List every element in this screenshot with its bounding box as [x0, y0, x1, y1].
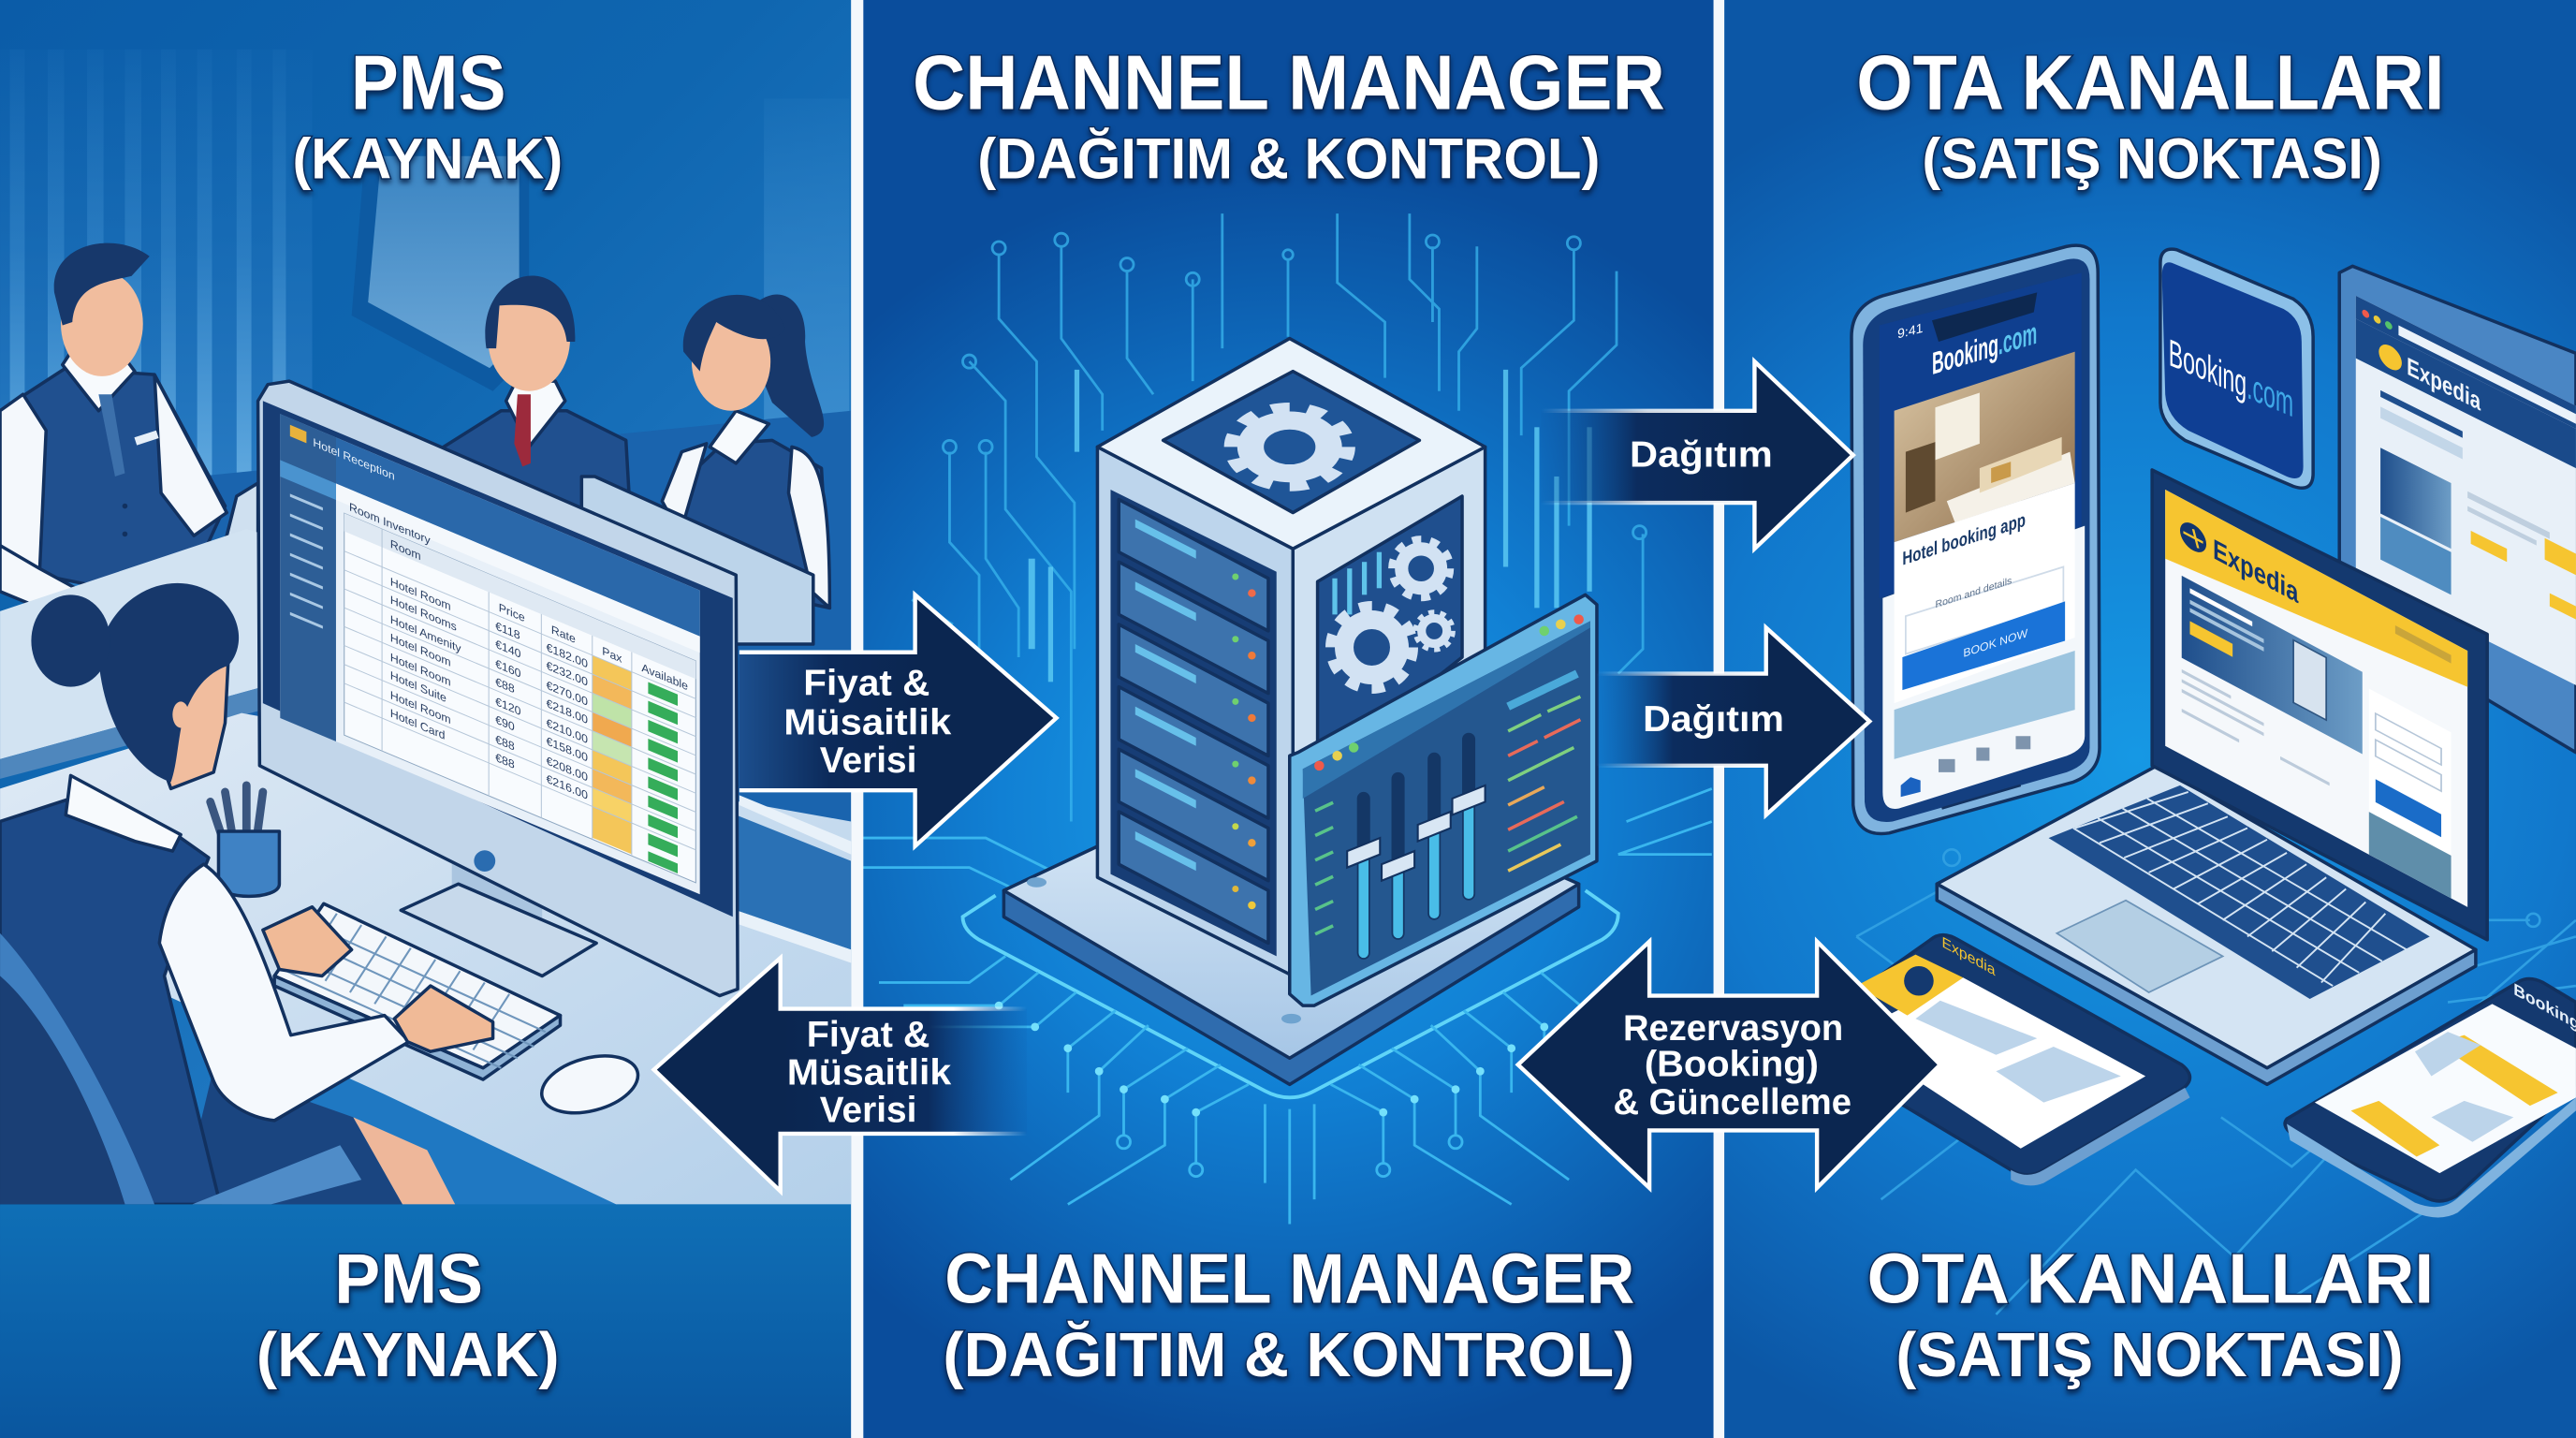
chair back seat	[131, 1117, 402, 1204]
lap	[181, 1068, 402, 1204]
PMS screen table	[280, 414, 700, 894]
top gear	[1234, 409, 1345, 485]
seated receptionist	[0, 583, 493, 1204]
keyboard	[274, 903, 561, 1079]
PMS screen table: €216.00	[547, 771, 588, 802]
PMS screen table: Room Inventory	[349, 500, 431, 548]
Booking.com tile	[2160, 249, 2313, 488]
channel manager background	[862, 0, 1714, 1438]
PMS screen table: Room	[390, 536, 421, 563]
curtains	[0, 50, 313, 592]
Booking.com tile: Booking.com	[2169, 330, 2293, 425]
arrow: booking and update double	[1518, 942, 1940, 1188]
OTA traces	[1856, 849, 2576, 1314]
person: center manager	[444, 275, 631, 526]
circuit traces top	[912, 213, 1647, 822]
monitor body	[258, 381, 738, 996]
PMS screen table: €182.00	[547, 640, 588, 671]
panel: OTA Kanallari	[1725, 0, 2576, 1438]
leg	[353, 1117, 455, 1204]
monitor screen	[2356, 296, 2576, 685]
back counter	[198, 411, 851, 920]
laptop lid	[2152, 470, 2487, 940]
tower top	[1097, 339, 1486, 549]
PMS screen table: Hotel Suite	[390, 668, 446, 705]
neck and face	[148, 657, 228, 788]
arrow: distribution one	[1541, 361, 1853, 549]
PMS screen table: €88	[495, 750, 515, 771]
arrow: price and availability to channel manager: Verisi	[820, 741, 916, 781]
base glow outline	[963, 890, 1618, 1097]
person: right receptionist	[662, 294, 829, 608]
available column	[648, 682, 678, 873]
chair	[0, 933, 154, 1204]
booking card	[1895, 483, 2075, 703]
laptop base	[1937, 766, 2476, 1068]
power dot	[474, 850, 495, 872]
booking card: BOOK NOW	[1963, 626, 2027, 660]
arrow: distribution two	[1597, 627, 1869, 814]
OTA background	[1725, 0, 2576, 1438]
phone screen top	[1880, 272, 2082, 598]
laptop keyboard	[2049, 785, 2430, 999]
top recess	[1164, 372, 1419, 513]
title: OTA top: OTA KANALLARI	[1856, 40, 2445, 126]
title: Channel Manager bottom	[943, 1240, 1634, 1390]
pen cup	[211, 785, 279, 896]
Booking.com phone logo: Booking.com	[1932, 315, 2037, 382]
PMS screen table: €88	[495, 732, 515, 754]
title: PMS bottom: (KAYNAK)	[256, 1321, 560, 1390]
PMS screen table: €118	[495, 619, 520, 642]
PMS screen table: €160	[495, 656, 520, 681]
phone status: 9:41	[1897, 321, 1924, 342]
PMS screen table: Hotel Rooms	[390, 593, 457, 634]
base plate	[1003, 756, 1579, 1084]
circuit traces bottom	[862, 788, 1712, 1224]
PMS bottom band	[0, 1204, 851, 1438]
title: OTA top	[1856, 40, 2445, 191]
rear left monitor	[212, 483, 258, 611]
rear monitor	[581, 477, 813, 644]
PMS screen table: Pax	[602, 644, 622, 666]
ear	[172, 701, 189, 727]
arrow: booking and update double: & Güncelleme	[1613, 1082, 1852, 1123]
title: PMS top: (KAYNAK)	[292, 126, 563, 191]
arrow: booking and update double: Rezervasyon	[1623, 1008, 1843, 1049]
title: PMS top	[292, 40, 563, 191]
PMS screen table: €232.00	[547, 658, 588, 689]
tablet left	[1804, 933, 2190, 1185]
control panel with sliders	[1290, 594, 1597, 1005]
PMS screen table: €270.00	[547, 678, 588, 709]
slider knobs	[1347, 785, 1486, 881]
monitor stand	[452, 855, 542, 940]
data bars	[1029, 370, 1592, 682]
PMS screen table: Price	[499, 600, 525, 624]
tablet right	[2285, 978, 2576, 1217]
hotel room photo	[1895, 352, 2075, 542]
person: left receptionist	[0, 243, 227, 614]
arrow: distribution one: Dağıtım	[1630, 434, 1773, 475]
main desk	[0, 713, 851, 1204]
rack units	[1110, 490, 1277, 956]
title: OTA top: (SATIŞ NOKTASI)	[1922, 126, 2382, 191]
PMS screen table: €218.00	[547, 696, 588, 726]
title: OTA bottom	[1867, 1240, 2434, 1390]
PMS screen table: Available	[641, 660, 688, 693]
phone screen bottom	[1882, 526, 2085, 809]
collar	[66, 775, 181, 851]
PMS screen table: €120	[495, 694, 520, 718]
slider tracks	[1364, 740, 1469, 953]
tower window with gears	[1318, 496, 1462, 772]
wall light panel	[764, 98, 849, 509]
lower photo	[1895, 651, 2075, 759]
title: OTA bottom: (SATIŞ NOKTASI)	[1895, 1321, 2404, 1390]
arrow: price and availability back to PMS: Müsaitlik	[787, 1052, 952, 1093]
title: Channel Manager bottom: CHANNEL MANAGER	[944, 1240, 1634, 1318]
phone	[1852, 245, 2100, 833]
side booking box	[2369, 689, 2452, 856]
mouse	[535, 1047, 644, 1123]
tower left side	[1097, 447, 1293, 976]
PMS screen table: Hotel Room	[390, 630, 451, 669]
arrow: distribution two: Dağıtım	[1643, 699, 1784, 740]
title: PMS bottom: PMS	[334, 1240, 483, 1318]
sleeve	[159, 864, 409, 1121]
PMS screen table: €140	[495, 637, 520, 661]
PMS screen table: Hotel Room	[390, 650, 451, 689]
arrow: price and availability back to PMS: Verisi	[820, 1091, 916, 1131]
tower right side	[1293, 447, 1486, 976]
PMS background wall	[0, 0, 851, 1204]
hair	[98, 583, 239, 782]
phone nav	[1901, 736, 2030, 808]
window	[352, 156, 529, 391]
hero image	[2182, 576, 2363, 754]
monitor screen: Expedia	[2407, 352, 2481, 417]
panel: PMS	[0, 0, 851, 1438]
arrow: price and availability back to PMS: Fiyat &	[807, 1015, 929, 1055]
arrow: price and availability to channel manager: Müsaitlik	[783, 702, 952, 742]
status column	[593, 655, 632, 854]
title: Channel Manager top: (DAĞITIM & KONTROL)	[977, 126, 1600, 191]
rows	[344, 513, 695, 883]
trackpad	[2056, 901, 2223, 992]
book button	[1902, 601, 2065, 690]
title: Channel Manager bottom: (DAĞITIM & KONTROL)	[943, 1321, 1634, 1390]
vest	[0, 799, 220, 1204]
arrow: booking and update double: (Booking)	[1645, 1045, 1819, 1085]
PMS screen table: Hotel Room	[390, 575, 451, 613]
back monitor	[2339, 266, 2576, 753]
PMS screen table: €208.00	[547, 754, 588, 785]
laptop screen: Expedia	[2213, 533, 2299, 609]
arrow: price and availability to channel manager	[739, 594, 1057, 846]
title: OTA bottom: OTA KANALLARI	[1867, 1240, 2434, 1318]
back desk left	[0, 529, 263, 779]
title: Channel Manager top: CHANNEL MANAGER	[913, 40, 1665, 126]
tablet left: Expedia	[1942, 933, 1996, 979]
panel left list	[1314, 801, 1334, 935]
booking card: Room and details	[1935, 575, 2012, 610]
arrow: price and availability to channel manager: Fiyat &	[803, 663, 929, 703]
PMS screen table: €88	[495, 674, 515, 696]
panel log lines	[1508, 674, 1580, 871]
PMS screen table: €210.00	[547, 715, 588, 746]
torso	[0, 368, 225, 587]
head	[61, 271, 143, 376]
laptop screen	[2165, 490, 2467, 907]
booking card: Hotel booking app	[1902, 509, 2026, 570]
divider: right	[1714, 0, 1724, 1438]
arrow: price and availability back to PMS	[654, 958, 1027, 1191]
panel: Channel Manager	[862, 0, 1714, 1438]
PMS screen table: Hotel Amenity	[390, 612, 461, 655]
PMS screen table: €158.00	[547, 734, 588, 765]
title: Channel Manager top	[913, 40, 1665, 191]
phone notch	[1932, 292, 2037, 342]
title: PMS top: PMS	[351, 40, 506, 126]
monitor	[258, 381, 738, 996]
PMS screen table: Hotel Room	[390, 688, 451, 726]
divider: left	[851, 0, 863, 1438]
laptop	[1937, 470, 2487, 1084]
title: PMS bottom	[256, 1240, 560, 1390]
PMS screen table: Hotel Card	[390, 706, 446, 742]
PMS screen table: Rate	[551, 623, 576, 646]
server tower with base	[1003, 339, 1597, 1084]
PMS screen table: Hotel Reception	[313, 435, 395, 483]
PMS screen table: €90	[495, 712, 515, 734]
hands	[263, 907, 352, 976]
tablet screen	[1848, 977, 2145, 1149]
